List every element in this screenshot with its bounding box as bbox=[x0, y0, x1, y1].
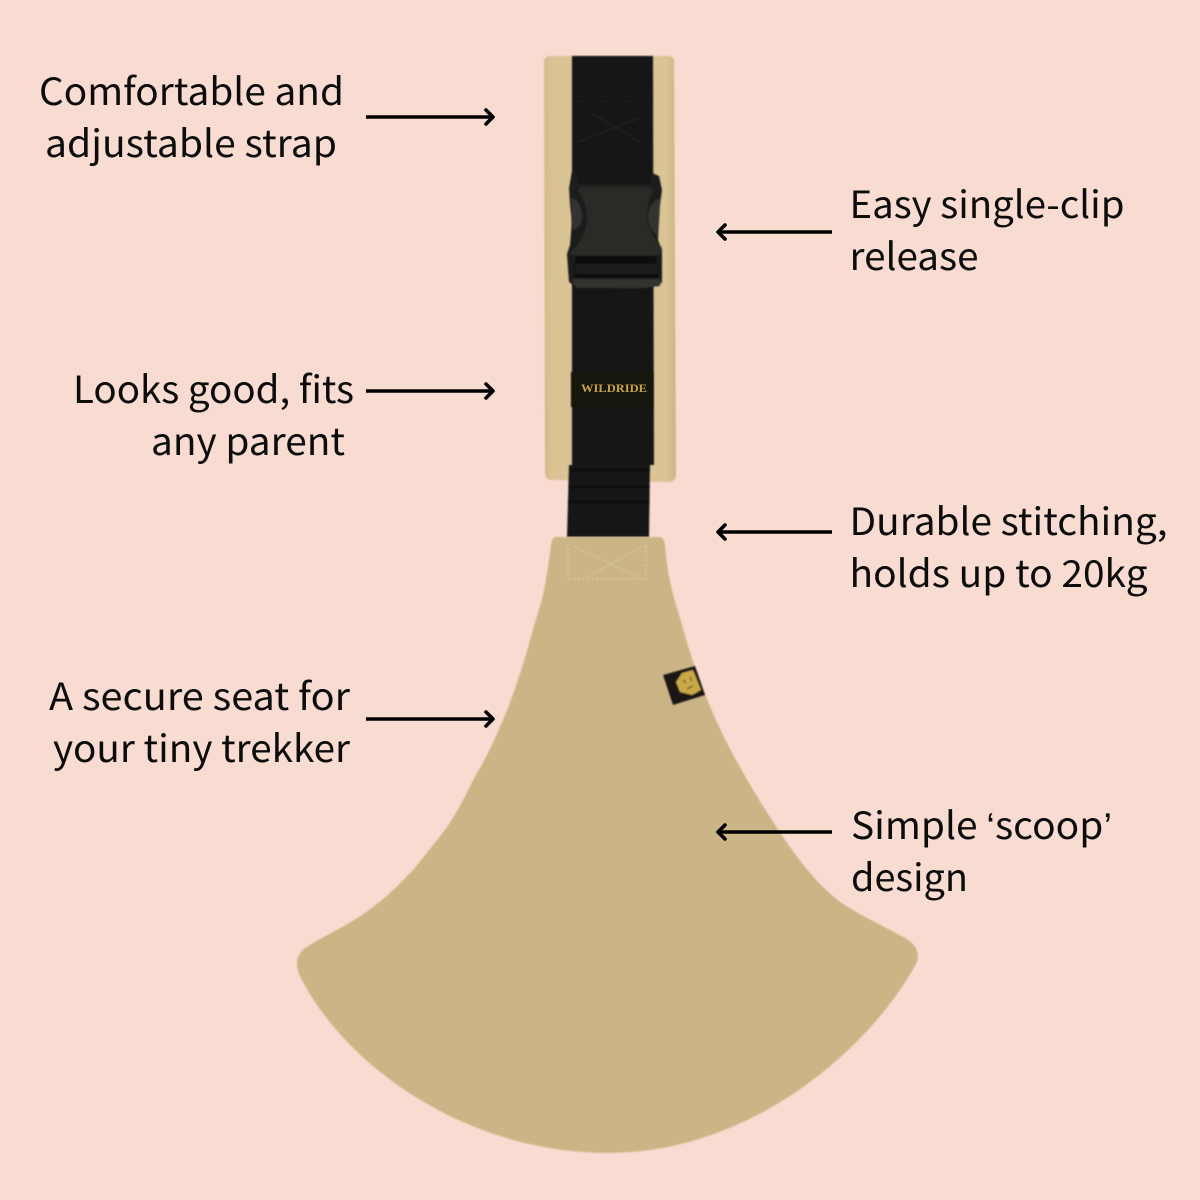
label: a secure seat: your tiny trekker bbox=[53, 718, 350, 773]
label: a secure seat: A secure seat for bbox=[49, 666, 350, 721]
label: looks good, fits any parent: Looks good, fits bbox=[73, 359, 354, 414]
label: durable stitching: holds up to 20kg bbox=[850, 543, 1148, 598]
label: simple scoop design: Simple ‘scoop’ bbox=[851, 795, 1112, 850]
label: comfortable and adjustable strap bbox=[39, 61, 344, 168]
label: easy single-clip release bbox=[850, 174, 1124, 281]
product: baby sling carrier bbox=[297, 56, 918, 1153]
arrow: to seat bbox=[366, 717, 493, 721]
label: durable stitching: Durable stitching, bbox=[850, 491, 1168, 546]
strap stitching bbox=[569, 101, 652, 502]
seat panel bbox=[297, 537, 918, 1153]
black webbing strap bbox=[567, 56, 654, 537]
label: comfortable and adjustable strap: Comfortable and bbox=[39, 61, 344, 116]
arrow: to scoop bbox=[718, 830, 832, 834]
label: durable stitching bbox=[850, 491, 1168, 598]
arrow: to buckle bbox=[718, 230, 832, 234]
label: looks good, fits any parent bbox=[73, 359, 354, 466]
label: simple scoop design: design bbox=[851, 847, 968, 902]
arrow: to stitching bbox=[718, 530, 832, 534]
arrow: to shoulder pad bbox=[366, 389, 493, 393]
label: looks good, fits any parent: any parent bbox=[151, 411, 345, 466]
brand label bbox=[571, 372, 653, 407]
arrow: to strap bbox=[366, 115, 493, 119]
label: easy single-clip release: Easy single-clip bbox=[850, 174, 1124, 229]
label: easy single-clip release: release bbox=[850, 226, 978, 281]
side release buckle bbox=[567, 172, 662, 289]
brand label: WILDRIDE bbox=[581, 383, 647, 395]
seat stitching bbox=[568, 544, 646, 579]
label: simple scoop design bbox=[851, 795, 1112, 902]
label: comfortable and adjustable strap: adjustable strap bbox=[45, 113, 337, 168]
icon: leopard badge bbox=[663, 666, 705, 705]
label: a secure seat bbox=[49, 666, 350, 773]
shoulder pad bbox=[544, 56, 676, 482]
